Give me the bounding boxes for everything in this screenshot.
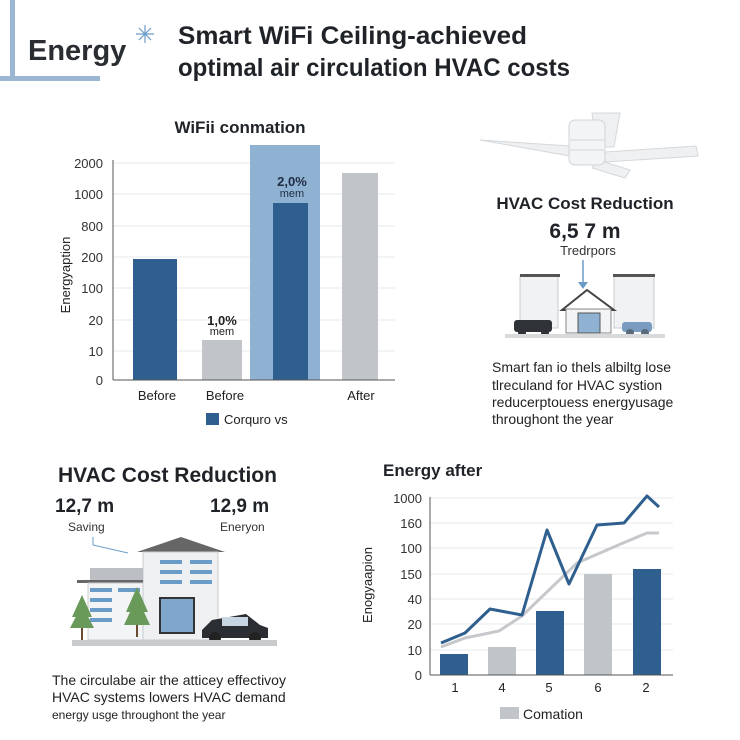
- bar chart: WiFii conmation: 20: [89, 313, 103, 328]
- panel: HVAC cost reduction left: HVAC systems lowers HVAC demand: [52, 689, 286, 705]
- line and bar chart: Energy after: 6: [594, 680, 602, 695]
- icon: house with car: [70, 537, 277, 646]
- line and bar chart: Energy after: 4: [498, 680, 506, 695]
- bar chart: WiFii conmation: 0: [96, 373, 103, 388]
- bar chart: WiFii conmation: Energyaption: [58, 237, 73, 313]
- panel: HVAC cost reduction right: Smart fan io thels albiltg lose: [492, 359, 671, 375]
- panel: HVAC cost reduction right: throughont the year: [492, 411, 614, 427]
- panel: HVAC cost reduction left: Saving: [68, 520, 105, 534]
- panel: HVAC cost reduction left: HVAC Cost Reduction: [58, 464, 277, 487]
- line and bar chart: Energy after: 2: [642, 680, 650, 695]
- panel: HVAC cost reduction right: [492, 194, 674, 427]
- line and bar chart: Energy after: Energy after: [383, 461, 483, 480]
- header: [0, 0, 570, 82]
- bar chart: WiFii conmation: mem: [280, 188, 304, 200]
- panel: HVAC cost reduction right: reducerptouess energyusage: [492, 394, 674, 410]
- icon: buildings: [505, 260, 665, 338]
- bar chart: WiFii conmation: 100: [81, 281, 103, 296]
- bar chart: WiFii conmation: 1,0%: [207, 313, 237, 328]
- bar chart: WiFii conmation: 800: [81, 219, 103, 234]
- bar chart: WiFii conmation: 1000: [74, 187, 103, 202]
- line and bar chart: Energy after: 5: [545, 680, 553, 695]
- logo text: Energy: [28, 35, 126, 67]
- line and bar chart: Energy after: 0: [415, 668, 422, 683]
- bar chart: WiFii conmation: 200: [81, 250, 103, 265]
- line and bar chart: Energy after: 40: [408, 592, 422, 607]
- panel: HVAC cost reduction left: [52, 464, 286, 722]
- panel: HVAC cost reduction left: 12,9 m: [210, 496, 269, 517]
- panel: HVAC cost reduction right: tlreculand for HVAC systion: [492, 377, 662, 393]
- bar chart: WiFii conmation: 10: [89, 344, 103, 359]
- line and bar chart: Energy after: 160: [400, 516, 422, 531]
- icon: sparkle: [136, 25, 154, 43]
- panel: HVAC cost reduction right: Tredrpors: [560, 243, 616, 258]
- bar chart: WiFii conmation: After: [347, 388, 375, 403]
- line and bar chart: Energy after: 1000: [393, 491, 422, 506]
- bar chart: WiFii conmation: WiFii conmation: [174, 118, 306, 137]
- header: optimal air circulation HVAC costs: [178, 54, 570, 82]
- panel: HVAC cost reduction left: 12,7 m: [55, 496, 114, 517]
- panel: HVAC cost reduction left: Eneryon: [220, 520, 265, 534]
- bar chart: WiFii conmation: [58, 118, 395, 427]
- panel: HVAC cost reduction right: HVAC Cost Reduction: [496, 194, 674, 213]
- line and bar chart: Energy after: [360, 461, 673, 722]
- line and bar chart: Energy after: 20: [408, 617, 422, 632]
- panel: HVAC cost reduction left: The circulabe air the atticey effectivoy: [52, 672, 286, 688]
- line and bar chart: Energy after: 150: [400, 567, 422, 582]
- title: Smart WiFi Ceiling-achieved: [178, 22, 527, 50]
- bar chart: WiFii conmation: mem: [210, 326, 234, 338]
- line and bar chart: Energy after: Comation: [523, 706, 583, 722]
- bar chart: WiFii conmation: Before: [206, 388, 244, 403]
- bar chart: WiFii conmation: Before: [138, 388, 176, 403]
- icon: ceiling fan: [480, 113, 698, 178]
- panel: HVAC cost reduction right: 6,5 7 m: [549, 220, 621, 243]
- bar chart: WiFii conmation: 2,0%: [277, 174, 307, 189]
- line and bar chart: Energy after: 100: [400, 541, 422, 556]
- bar chart: WiFii conmation: Corquro vs: [224, 412, 288, 427]
- line and bar chart: Energy after: 10: [408, 643, 422, 658]
- panel: HVAC cost reduction left: energy usge throughont the year: [52, 708, 225, 722]
- bar chart: WiFii conmation: 2000: [74, 156, 103, 171]
- line and bar chart: Energy after: 1: [451, 680, 459, 695]
- line and bar chart: Energy after: Enogyaapion: [360, 547, 375, 623]
